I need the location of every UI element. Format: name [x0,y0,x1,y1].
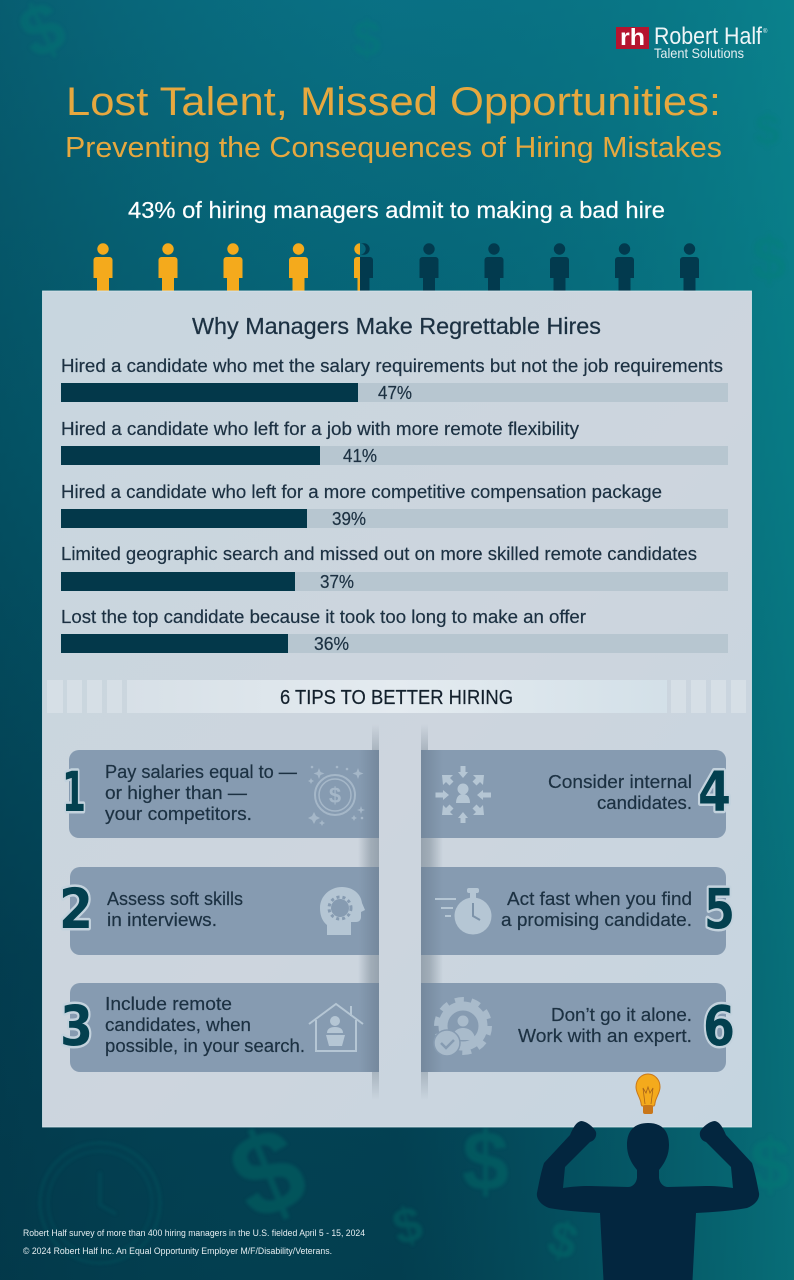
tip 6 card: Don’t go it alone. [551,1005,692,1025]
tip 2 card: Assess soft skills [107,889,243,909]
banner: 6 tips to better hiring: 6 TIPS TO BETTER HIRING [280,687,513,709]
logo: Robert Half Talent Solutions: Robert Half [654,23,762,50]
icon: stopwatch [435,888,492,934]
background: $ [387,1195,428,1256]
footnotes: Robert Half survey of more than 400 hiring managers in the U.S. fielded April 5 - 15, 2024 [23,1228,365,1239]
tip 1 card: or higher than — [105,783,247,803]
tip 4 card: 4 [698,760,731,824]
tip 4 card [421,750,731,838]
icon: head with gear [320,887,365,935]
tip 6 card: Work with an expert. [518,1026,692,1046]
bar chart: reasons for regrettable hires: 47% [378,383,412,403]
logo: Robert Half Talent Solutions [616,23,768,61]
tip 2 card: in interviews. [107,910,217,930]
tip 5 card: 5 [704,877,735,941]
footnotes [23,1228,365,1257]
headline statistic: 43% of hiring managers admit to making a bad hire [128,197,665,223]
bar chart: reasons for regrettable hires: Hired a candidate who met the salary requirements but not the job requirements [61,356,723,376]
tip 4 card: Consider internal [548,772,692,792]
bar chart: reasons for regrettable hires: Hired a candidate who left for a job with more remote flexibility [61,419,579,439]
icon: light bulb [636,1074,660,1114]
panel: main content [42,291,752,1127]
background: $ [462,1114,509,1208]
bar chart: reasons for regrettable hires: Limited geographic search and missed out on more skilled remote candidates [61,544,697,564]
tip 1 card: your competitors. [105,804,252,824]
tip 1 card: Pay salaries equal to — [105,762,297,782]
background: $ [755,106,779,155]
tip 6 card: 6 [703,994,735,1058]
background: $ [750,1125,790,1205]
banner: 6 tips to better hiring [47,680,746,713]
bar chart: reasons for regrettable hires: 37% [320,572,354,592]
footnotes: © 2024 Robert Half Inc. An Equal Opportunity Employer M/F/Disability/Veterans. [23,1246,332,1257]
background: $ [542,1210,584,1271]
icon: dollar coin with sparkles [308,766,365,826]
bar chart: reasons for regrettable hires: Hired a candidate who left for a more competitive compensation package [61,482,662,502]
bar chart: reasons for regrettable hires: 39% [332,509,366,529]
logo: Robert Half Talent Solutions: rh [620,24,645,50]
pictogram: 43 percent of people [94,243,699,292]
bar chart: reasons for regrettable hires: 41% [343,446,377,466]
tip 5 card [421,867,735,955]
tip 3 card [60,983,379,1072]
tip 2 card [59,867,379,955]
tip 5 card: Act fast when you find [507,889,692,909]
title: Lost Talent, Missed Opportunities: [66,80,721,124]
tip 1 card [62,750,379,838]
icon: dollar coin with sparkles: $ [329,783,341,808]
fold shadows beside the centre column [358,724,443,1100]
tip 2 card: 2 [59,877,93,941]
tip 6 card [421,983,735,1072]
tip 1 card: 1 [62,760,86,824]
icon: gear with person and check mark [434,1000,490,1056]
bar chart: reasons for regrettable hires: 36% [314,634,349,654]
icon: person working at home [309,1004,363,1051]
logo: Robert Half Talent Solutions: Talent Solutions [654,45,744,61]
background: $ [213,1100,323,1247]
title: Preventing the Consequences of Hiring Mistakes [65,132,722,164]
background: $ [752,225,786,294]
heading: why managers make regrettable hires: Why Managers Make Regrettable Hires [192,313,601,339]
title [65,80,722,164]
logo: Robert Half Talent Solutions: ® [763,28,768,35]
icon: arrows pointing to person [436,766,491,823]
tip 3 card: possible, in your search. [105,1036,305,1056]
silhouette: person flexing [537,1121,759,1280]
tip 3 card: 3 [60,994,93,1058]
tip 5 card: a promising candidate. [501,910,692,930]
background: $ [353,11,381,67]
bar chart: reasons for regrettable hires [61,356,728,654]
tip 3 card: Include remote [105,994,232,1014]
tip 4 card: candidates. [597,793,692,813]
bar chart: reasons for regrettable hires: Lost the top candidate because it took too long to make an offer [61,607,586,627]
tip 3 card: candidates, when [105,1015,251,1035]
